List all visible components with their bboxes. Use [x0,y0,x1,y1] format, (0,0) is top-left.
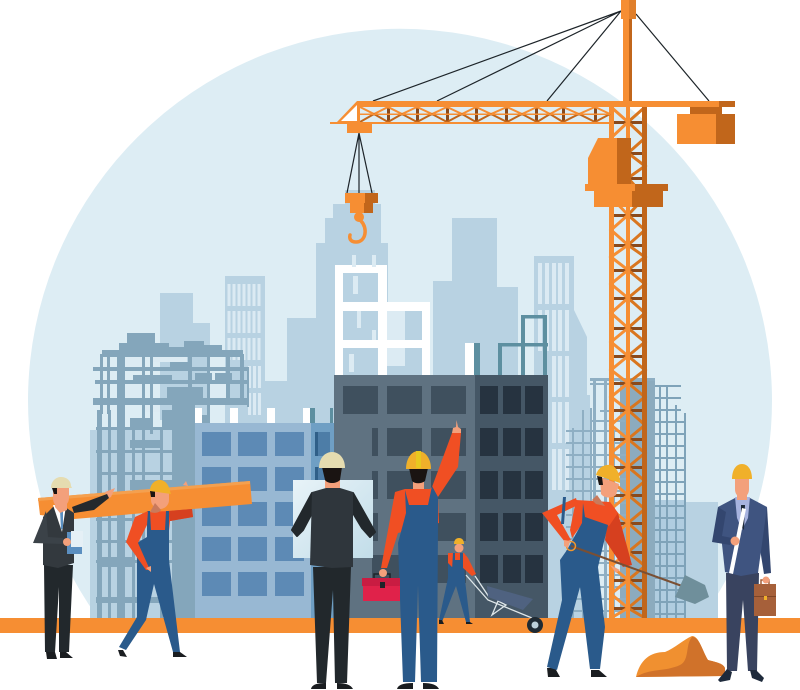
small worker: shirt [448,553,476,576]
right scaffold [566,378,686,618]
dark building: left face [334,375,475,618]
toolbox: body [363,586,400,601]
pointing worker: hair [409,468,428,483]
building: slanted right tower [534,256,590,618]
dark building: left windows [343,386,466,583]
pointing worker: overalls [398,486,438,682]
tower window strips [228,263,569,490]
suited man: neck and face [53,487,69,513]
suited man: pointing arm [72,494,109,513]
businessman: neck and face [735,478,749,500]
crane: nose opening [341,105,357,121]
person: suited man pointing [33,477,115,659]
dark building: right windows [480,386,543,583]
pointing worker: hand on toolbox [379,569,387,577]
suited man: paper [71,531,83,547]
shovel worker: hair [597,476,603,485]
shovel worker: shirt [570,500,618,538]
crane: jib rungs [387,107,597,122]
pointing worker: shirt and arms [381,433,461,568]
building: lower left base [90,430,195,618]
briefcase: clasp [764,596,767,600]
person: worker seen from behind pointing up [362,420,461,689]
plank worker: face [151,490,169,509]
shovel worker: overalls [547,503,608,670]
pointing worker: raised hand [452,420,461,433]
crane: hook block upper shade [365,193,378,203]
scaffold: right grid [655,385,686,618]
scaffold: columns [97,354,249,618]
crane: mast left lacing [611,107,628,618]
shovel worker: hard hat [596,465,620,483]
crane: counterweight [677,114,716,144]
toolbox: lid [362,578,400,586]
building: behind right scaffold [655,500,686,618]
plank worker: hair [150,491,155,497]
crane: top post shade [629,0,632,105]
rear man: arms [292,493,375,537]
rear man: legs [313,567,351,683]
background circle [28,29,772,618]
wooden plank [38,481,252,519]
crane: mast right lacing [628,107,645,618]
tower crane [330,0,735,618]
crane: jib upper lacing [360,107,610,114]
businessman: shoes [718,669,764,682]
crane: hook [350,212,365,242]
small worker: hat [454,538,464,544]
skyline: distant buildings [90,190,718,618]
suited man: legs [44,565,73,652]
small worker: shoes [439,620,473,624]
crane: head [621,0,629,19]
businessman: jacket [718,498,767,576]
businessman: right arm [757,507,771,574]
person: small worker with wheelbarrow [439,538,543,633]
pointing worker: hard hat [406,451,431,469]
crane: mast rungs [612,121,644,610]
crane: counter jib end [719,101,735,107]
suited man: hair [52,488,57,494]
plank worker: overalls [119,511,180,652]
wheelbarrow [466,575,543,633]
crane: jib chords [330,101,719,124]
plank worker: far sleeve [168,509,193,521]
building: center right block [433,218,518,618]
shovel: handle [571,546,682,586]
building: center stepped tower [316,190,388,618]
orange ground strip [0,618,800,633]
shovel worker: face [600,477,619,498]
plank worker: hard hat [150,480,171,494]
shovel worker: near arm [542,498,578,542]
crane: cab [588,138,617,184]
dark building [334,375,548,618]
suited man: shirt [53,505,66,532]
shovel worker: strap [561,497,566,524]
suited man: tie [60,510,63,530]
sand pile [636,636,725,677]
suited man: hand [63,538,71,546]
rebar and posts above dark building [465,315,548,376]
businessman: left arm [712,507,732,545]
small worker: legs [439,563,470,622]
small worker: bib [452,553,463,570]
briefcase [754,580,776,616]
shovel worker: shoes [547,668,607,677]
toolbox: handle [374,574,390,578]
businessman: tie [741,505,745,530]
businessman: rolled plan [729,508,746,574]
suited man: shoes [46,652,73,659]
building: low connecting block [265,318,316,618]
businessman: legs [726,573,759,671]
plank worker: arm [126,511,150,570]
crane: hook block upper [345,193,365,203]
wheelbarrow: tray [487,586,533,610]
briefcase: body [754,584,776,616]
crane: nose block [347,124,372,133]
businessman: hard hat [732,464,752,479]
wheelbarrow: hub [532,622,538,628]
rear man: hard hat [319,452,345,468]
blue building: side windows [315,432,368,596]
person: worker carrying plank [118,480,193,657]
person: worker with shovel [542,465,709,677]
plank worker: hand [146,566,151,572]
white building frame [335,255,430,375]
crane: turntable [594,191,632,207]
person: businessman with briefcase [712,464,776,682]
shovel worker: far arm [605,502,632,567]
rear man: blueprint [293,480,373,558]
briefcase: handle [761,580,769,585]
scaffold: stepped roof [102,333,243,354]
scaffold: light cells [125,357,226,412]
dark building: right face [475,375,548,618]
blue building: side face [311,423,372,618]
shovel worker: neck [592,495,605,506]
crane: cab shade [617,138,631,184]
pointing worker: shoes [397,683,439,689]
plank worker: shirt [147,509,193,543]
crane: head shade [629,0,636,19]
businessman: hand on case [762,576,770,584]
suited man: left arm [33,511,63,544]
suited man: raised hand [105,488,115,499]
toolbox [362,574,400,601]
crane: cables [347,11,709,193]
businessman: shirt [735,497,750,530]
rear man: hair [322,467,342,483]
crane: hook block lower [350,203,364,213]
blue building: teal rebar [310,408,371,423]
scaffold: back grid [566,378,655,618]
left scaffold building [93,333,249,618]
pointing worker: neck [413,482,424,489]
building: lower right base [686,502,718,618]
suited man: jacket [43,507,74,568]
rear man: shoes [311,683,353,689]
shovel: blade [675,575,709,604]
businessman: hand [730,536,740,546]
crane: top post [623,0,629,105]
crane: platform [585,184,635,191]
rear man: neck [325,480,340,488]
crane: counterweight shade [716,114,735,144]
plank worker: neck [150,503,161,513]
plank worker: far hand [183,481,188,486]
shovel: ring [566,542,576,550]
wheelbarrow: wheel [527,617,543,633]
blue building: white posts [195,408,311,423]
plank worker: shoes [118,650,187,657]
crane: jib lower lacing [360,114,610,122]
pointing worker: hat stripe [416,451,421,468]
blue building: front windows [202,432,304,596]
scaffold: steel core [620,381,655,618]
person: man in dark suit seen from behind [292,452,375,689]
scaffold: stacked blocks [102,362,232,618]
shovel worker: hands [564,540,620,573]
briefcase: flap line [754,596,776,597]
building: lined tower [225,276,265,436]
blue building: front face [195,423,311,618]
wheelbarrow: frame [466,575,532,618]
crane: hook block lower shade [364,203,373,213]
crane: mast right rail [642,107,647,618]
suited man: clipboard [67,532,82,554]
crane: turntable shade [632,191,663,207]
scaffold: floor beams [93,354,248,603]
blue building [195,408,372,618]
rear man: jacket [310,488,353,568]
crane: mast left rail [609,107,614,618]
toolbox: latch [380,582,385,588]
crane: counterweight support [690,107,722,114]
building: far left block [160,293,210,420]
blue building: side window panes [318,432,368,491]
crane: mast center post [626,107,630,618]
small worker: face [454,544,464,552]
suited man: hard hat [51,477,72,488]
crane: platform shade [635,184,668,191]
